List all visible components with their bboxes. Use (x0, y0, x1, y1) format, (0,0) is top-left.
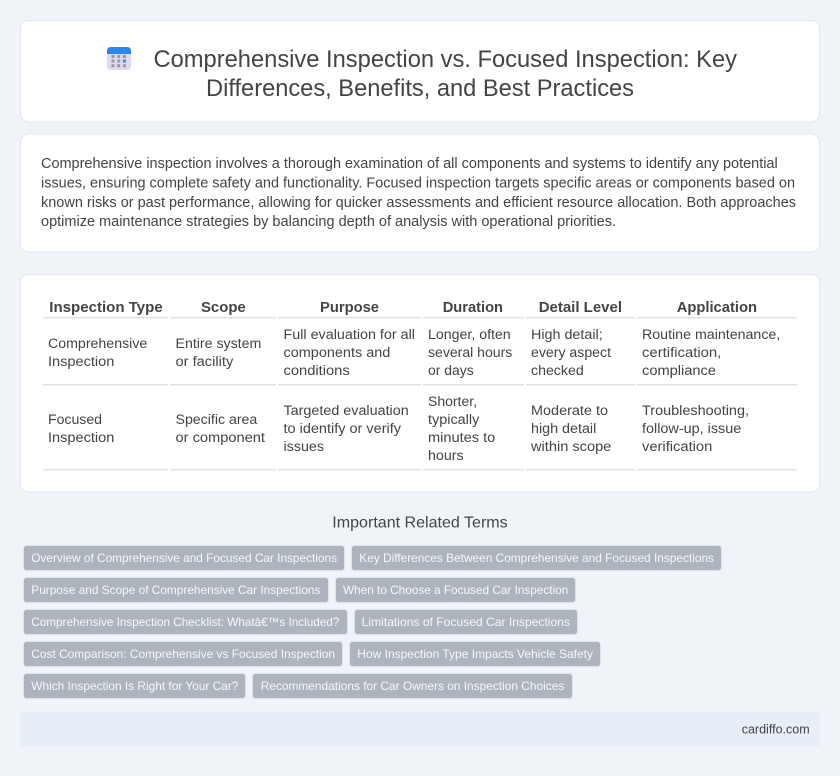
chip: Cost Comparison: Comprehensive vs Focused Inspection (31, 647, 335, 661)
chip: Overview of Comprehensive and Focused Car Inspections (31, 551, 337, 565)
table header row: Detail Level (539, 299, 622, 316)
table header row: Inspection Type (49, 299, 163, 316)
table row: focused inspection: to identify or verify (284, 421, 402, 437)
chip: Key Differences Between Comprehensive and Focused Inspections (359, 551, 714, 565)
chip (24, 642, 342, 666)
panel: title header (20, 20, 820, 122)
chip (24, 546, 344, 570)
table row: comprehensive inspection: Full evaluation for all (284, 327, 415, 343)
table row: focused inspection: within scope (530, 439, 611, 455)
table row: comprehensive inspection: Longer, often (428, 327, 511, 343)
table row: comprehensive inspection: every aspect (531, 345, 611, 361)
chip: Limitations of Focused Car Inspections (362, 615, 570, 629)
table row: comprehensive inspection: checked (531, 363, 584, 379)
panel: comparison table (20, 274, 820, 492)
table row: comprehensive inspection: components and (284, 345, 390, 361)
chip (24, 674, 246, 698)
table row: focused inspection: Shorter, (428, 394, 477, 410)
chip: When to Choose a Focused Car Inspection (343, 583, 568, 597)
chip (24, 610, 348, 634)
chip: Recommendations for Car Owners on Inspection Choices (261, 679, 564, 693)
table row: focused inspection: issues (284, 439, 324, 455)
table header row: Purpose (320, 299, 379, 316)
table header row: Scope (201, 299, 246, 316)
table row: comprehensive inspection: or days (428, 363, 474, 379)
table row: focused inspection: Specific area (176, 412, 257, 428)
summary text: known risks or past performance, allowing for quicker assessments and efficient resource allocation. Both approaches (41, 195, 796, 211)
chip (336, 578, 576, 602)
chip (354, 610, 578, 634)
summary text (41, 156, 796, 230)
table header row (43, 299, 797, 318)
table row: focused inspection: typically (428, 412, 480, 428)
table row: comprehensive inspection: Comprehensive (48, 336, 147, 352)
table row: comprehensive inspection: or facility (176, 354, 234, 370)
table row: focused inspection: verification (642, 439, 712, 455)
table row: comprehensive inspection: Entire system (176, 336, 261, 352)
chip: Comprehensive Inspection Checklist: Whatâ€™s Included? (31, 615, 340, 629)
table row: focused inspection: hours (428, 448, 464, 464)
chip (352, 546, 722, 570)
summary text: Comprehensive inspection involves a thorough examination of all components and systems to identify any potential (41, 156, 778, 172)
table row: comprehensive inspection: Inspection (48, 354, 114, 370)
table row: focused inspection: follow-up, issue (642, 421, 741, 437)
related terms chips (24, 546, 722, 698)
table row: focused inspection (43, 394, 797, 470)
icon: calendar (107, 47, 131, 70)
table row: comprehensive inspection: compliance (642, 363, 716, 379)
title: Differences, Benefits, and Best Practices (206, 75, 634, 102)
chip: Which Inspection Is Right for Your Car? (31, 679, 239, 693)
table row: focused inspection: Focused (48, 412, 102, 428)
table row: focused inspection: Moderate to (531, 403, 608, 419)
table row: focused inspection: Troubleshooting, (642, 403, 749, 419)
title (154, 46, 737, 102)
chip: Purpose and Scope of Comprehensive Car Inspections (31, 583, 320, 597)
chip (350, 642, 600, 666)
table row: focused inspection: Targeted evaluation (284, 403, 409, 419)
footer: cardiffo.com (742, 722, 810, 736)
table header row: Duration (443, 299, 503, 316)
table row: comprehensive inspection (43, 327, 797, 385)
table row: comprehensive inspection: certification, (642, 345, 721, 361)
title: Comprehensive Inspection vs. Focused Inspection: Key (154, 46, 737, 73)
chip: How Inspection Type Impacts Vehicle Safety (357, 647, 593, 661)
table row: focused inspection: or component (176, 430, 265, 446)
heading: important related terms: Important Related Terms (332, 515, 508, 532)
table row: comprehensive inspection: several hours (428, 345, 512, 361)
chip (252, 674, 572, 698)
summary text: issues, ensuring complete safety and functionality. Focused inspection targets specific areas or components based on (41, 176, 795, 192)
table header row: Application (677, 299, 757, 316)
table row: comprehensive inspection: conditions (284, 363, 350, 379)
table row: focused inspection: minutes to (428, 430, 495, 446)
table row: comprehensive inspection: High detail; (531, 327, 603, 343)
footer (20, 712, 820, 746)
chip (24, 578, 328, 602)
table row: focused inspection: high detail (531, 421, 596, 437)
panel: summary paragraph (20, 134, 820, 252)
summary text: optimize maintenance strategies by balancing depth of analysis with operational priorities. (41, 214, 616, 230)
table row: comprehensive inspection: Routine maintenance, (642, 327, 780, 343)
table row: focused inspection: Inspection (48, 430, 114, 446)
